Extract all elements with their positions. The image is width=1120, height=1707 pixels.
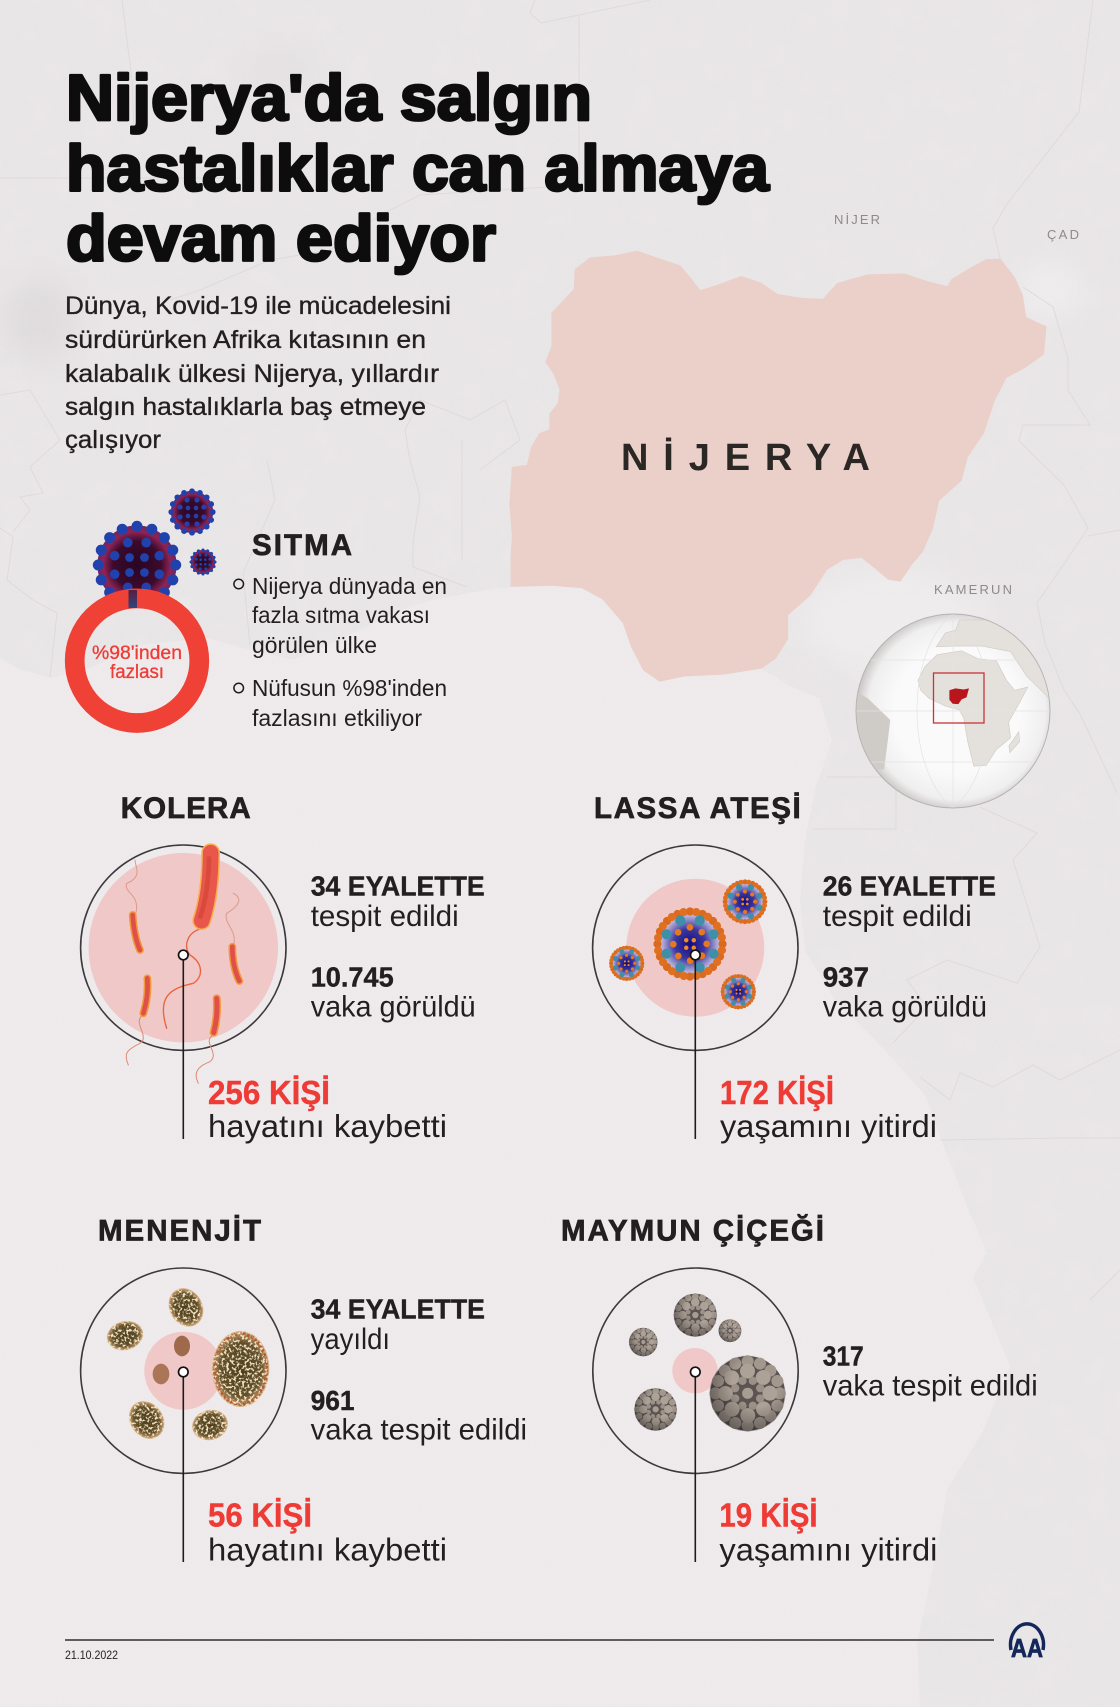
pink disc	[144, 1332, 222, 1410]
stat: states	[311, 871, 485, 933]
stat: deaths: 56 KİŞİ	[208, 1497, 312, 1534]
stat: cases: vaka tespit edildi	[823, 1369, 1038, 1402]
icon: virus stem	[128, 590, 137, 608]
stat: deaths	[720, 1074, 937, 1144]
panel: Maymun çiçeği	[561, 1214, 1038, 1568]
logo: AA	[1010, 1624, 1044, 1663]
donut chart: over 98 percent	[75, 598, 199, 723]
stat: deaths: yaşamını yitirdi	[719, 1532, 937, 1568]
stat: cases: vaka görüldü	[823, 991, 987, 1024]
stat: cases: 10.745	[311, 962, 394, 993]
text: bullet one: görülen ülke	[252, 632, 377, 658]
heading: Lassa ateşi: LASSA ATEŞİ	[594, 792, 801, 825]
icon: Lassa viruses	[606, 875, 771, 1012]
bullet	[234, 683, 244, 693]
stat: cases: vaka tespit edildi	[311, 1413, 527, 1446]
intro text: kalabalık ülkesi Nijerya, yıllardır	[65, 360, 439, 388]
stat: states: 34 EYALETTE	[311, 871, 485, 902]
locator globe	[853, 614, 1050, 808]
panel: Lassa ateşi	[593, 792, 996, 1144]
stat: states: tespit edildi	[311, 900, 459, 933]
stat: states: tespit edildi	[823, 900, 972, 933]
stat: deaths: 256 KİŞİ	[208, 1074, 330, 1111]
intro text: çalışıyor	[65, 426, 161, 454]
map label: Nigeria: NİJERYA	[621, 437, 870, 479]
stat: cases	[823, 1341, 1038, 1402]
icon: monkeypox viruses	[629, 1293, 786, 1431]
leader line	[182, 955, 184, 1139]
intro text: sürdürürken Afrika kıtasının en	[65, 326, 426, 354]
text: bullet two	[252, 675, 447, 731]
logo: AA: AA	[1011, 1633, 1043, 1663]
stat: deaths: hayatını kaybetti	[208, 1532, 447, 1568]
text: bullet one: Nijerya dünyada en	[252, 573, 447, 599]
title: devam ediyor	[66, 202, 496, 274]
stat: states: 34 EYALETTE	[311, 1294, 485, 1325]
stat: cases: 937	[823, 962, 869, 993]
bullet	[234, 579, 244, 589]
pink disc	[89, 853, 278, 1042]
stat: states: yayıldı	[311, 1323, 390, 1356]
icon: meningitis bacteria	[104, 1282, 269, 1446]
background map: country borders	[0, 0, 1120, 1300]
stat: deaths	[208, 1074, 447, 1144]
map label: Chad: ÇAD	[1047, 227, 1079, 242]
intro text	[65, 292, 451, 454]
heading: Sıtma: SITMA	[252, 529, 352, 562]
stat: cases: 317	[823, 1341, 864, 1372]
heading: Menenjit: MENENJİT	[98, 1215, 261, 1248]
icon: cholera bacteria	[126, 853, 239, 1083]
stat: cases: vaka görüldü	[311, 991, 476, 1024]
stat: cases	[311, 1385, 527, 1446]
outer circle	[593, 845, 798, 1050]
stat: deaths: 19 KİŞİ	[719, 1497, 818, 1534]
stat: cases	[823, 962, 987, 1024]
background map: blotches	[2, 50, 1080, 670]
stat: deaths: 172 KİŞİ	[720, 1074, 834, 1111]
leader dot	[690, 1367, 700, 1377]
stat: states	[311, 1294, 485, 1356]
pink disc	[626, 879, 764, 1017]
title	[66, 61, 770, 274]
stat: deaths	[208, 1497, 447, 1568]
text: bullet one	[252, 573, 447, 658]
text: bullet two: Nüfusun %98'inden	[252, 675, 447, 701]
intro text: salgın hastalıklarla baş etmeye	[65, 393, 426, 421]
date: 21.10.2022	[65, 1650, 118, 1662]
leader dot	[690, 950, 700, 960]
map label: Niger: NİJER	[834, 212, 880, 227]
text: bullet one: fazla sıtma vakası	[252, 602, 430, 628]
stat: cases	[311, 962, 476, 1024]
globe: location box	[934, 673, 984, 723]
outer circle	[593, 1268, 798, 1473]
stat: states: 26 EYALETTE	[823, 871, 996, 902]
panel: Menenjit	[81, 1215, 527, 1568]
stat: deaths: yaşamını yitirdi	[720, 1108, 937, 1144]
stat: cases: 961	[311, 1385, 355, 1416]
outer circle	[81, 1268, 286, 1473]
background map: sea	[0, 586, 1010, 1707]
leader line	[694, 1372, 696, 1562]
leader dot	[178, 950, 188, 960]
donut label: fazlası	[110, 662, 164, 683]
donut label: %98'inden	[92, 643, 182, 664]
leader line	[694, 955, 696, 1139]
panel: Sıtma	[75, 489, 447, 731]
pink disc	[672, 1348, 718, 1393]
footer rule	[65, 1639, 994, 1641]
text: bullet two: fazlasını etkiliyor	[252, 705, 422, 731]
heading: Maymun çiçeği: MAYMUN ÇİÇEĞİ	[561, 1214, 824, 1248]
title: hastalıklar can almaya	[66, 132, 770, 204]
panel: Kolera	[81, 792, 485, 1144]
globe: Nigeria highlight	[949, 688, 969, 704]
intro text: Dünya, Kovid-19 ile mücadelesini	[65, 292, 451, 320]
donut label	[92, 643, 182, 683]
stat: deaths: hayatını kaybetti	[208, 1108, 447, 1144]
map label: Cameroon: KAMERUN	[934, 582, 1012, 597]
title: Nijerya'da salgın	[66, 61, 592, 134]
stat: states	[823, 871, 996, 933]
leader line	[182, 1372, 184, 1562]
icon: malaria viruses	[93, 489, 216, 609]
heading: Kolera: KOLERA	[121, 792, 251, 825]
leader dot	[178, 1367, 188, 1377]
map: Nigeria	[509, 251, 1047, 682]
stat: deaths	[719, 1497, 937, 1568]
outer circle	[81, 845, 286, 1050]
